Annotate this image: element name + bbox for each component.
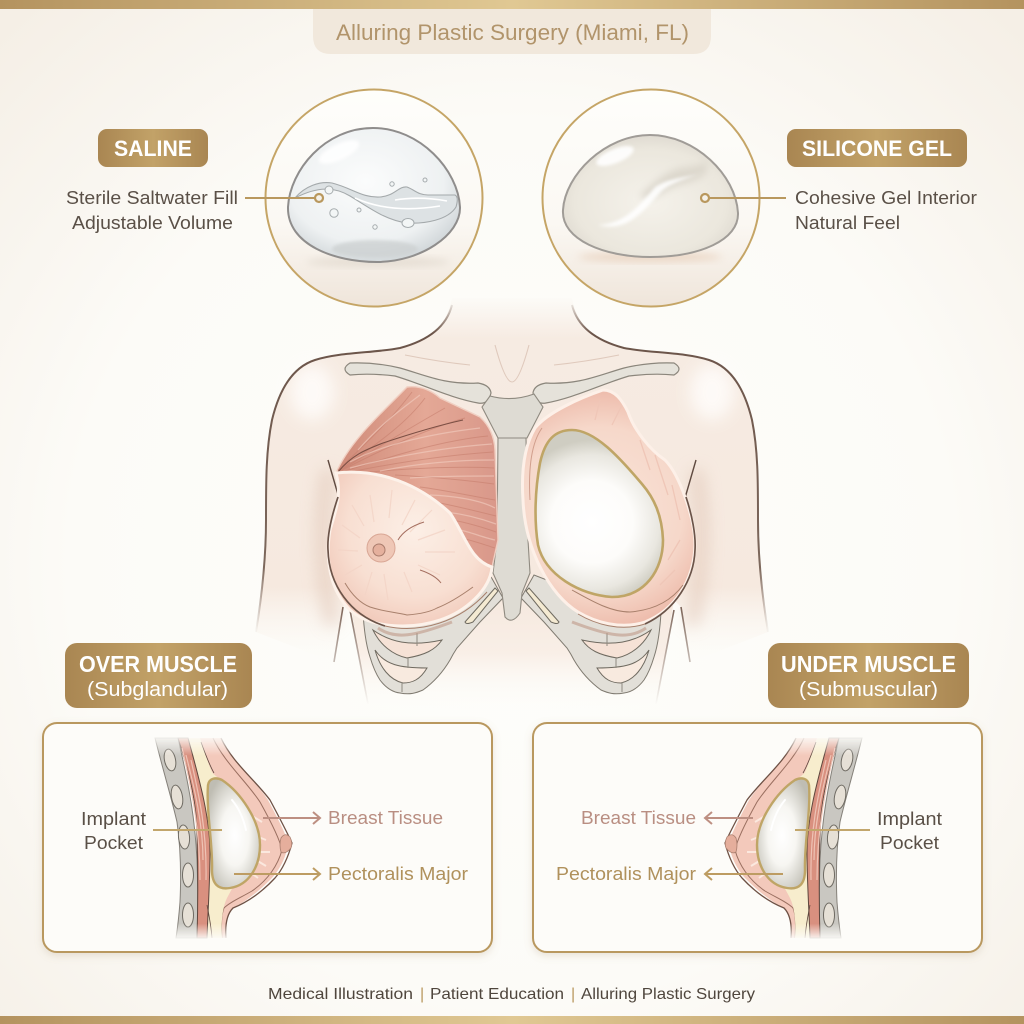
label: silicone description <box>795 188 977 233</box>
left side: pectoral muscle <box>336 387 498 567</box>
over muscle label: implant pocket: Implant <box>81 809 146 829</box>
over muscle frame <box>43 723 492 952</box>
over muscle label: implant pocket <box>81 809 146 853</box>
panel: under muscle cross-section <box>533 723 982 952</box>
bottom gold bar <box>0 1016 1024 1024</box>
label: silicone heading: SILICONE GEL <box>802 136 952 161</box>
label: saline description <box>66 188 238 233</box>
saline implant dome <box>288 128 460 267</box>
label: saline description: Sterile Saltwater Fill <box>66 188 238 208</box>
label: under muscle heading: (Submuscular) <box>799 679 938 701</box>
saline leader <box>245 194 323 202</box>
implant in pocket <box>536 430 663 597</box>
under muscle anatomy <box>725 738 862 938</box>
footer: Patient Education <box>430 986 564 1003</box>
footer: | <box>420 986 424 1003</box>
under muscle label: pectoralis major: Pectoralis Major <box>556 864 696 884</box>
footer <box>268 986 755 1003</box>
under muscle label: implant pocket: Implant <box>877 809 942 829</box>
panel: over muscle cross-section <box>43 723 492 952</box>
panel: saline implant <box>245 90 482 306</box>
silicone circle <box>542 90 760 306</box>
clavicles <box>345 363 679 403</box>
under muscle arrow: pectoralis major <box>705 868 783 880</box>
under muscle label: implant pocket <box>877 809 942 853</box>
right side: breast tissue with implant <box>522 390 695 627</box>
label: over muscle heading: OVER MUSCLE <box>79 651 237 677</box>
footer: Alluring Plastic Surgery <box>581 986 755 1003</box>
top gold bar <box>0 0 1024 9</box>
over muscle label: implant pocket: Pocket <box>84 833 143 853</box>
label: saline heading: SALINE <box>114 136 192 161</box>
over muscle label: pectoralis major: Pectoralis Major <box>328 864 468 884</box>
label: silicone description: Cohesive Gel Interior <box>795 188 977 208</box>
label: silicone heading <box>787 129 967 167</box>
label: silicone description: Natural Feel <box>795 213 900 233</box>
over muscle anatomy <box>155 738 292 938</box>
over muscle arrow: pectoralis major <box>234 868 320 880</box>
saline circle <box>266 90 482 306</box>
silicone leader <box>701 194 786 202</box>
title <box>313 9 711 54</box>
footer: | <box>571 986 575 1003</box>
over muscle label: breast tissue: Breast Tissue <box>328 808 443 828</box>
label: under muscle heading: UNDER MUSCLE <box>781 651 956 677</box>
under muscle label: implant pocket: Pocket <box>880 833 939 853</box>
under muscle leader: implant pocket <box>795 829 870 831</box>
left side: breast tissue <box>328 472 492 628</box>
torso <box>256 298 768 708</box>
under muscle label: breast tissue: Breast Tissue <box>581 808 696 828</box>
label: over muscle heading: (Subglandular) <box>87 679 228 701</box>
under muscle arrow: breast tissue <box>705 812 753 824</box>
under muscle frame <box>533 723 982 952</box>
central anatomy illustration <box>256 298 768 708</box>
label: over muscle heading <box>65 643 252 708</box>
over muscle leader: implant pocket <box>153 829 222 831</box>
title: Alluring Plastic Surgery (Miami, FL) <box>336 20 689 45</box>
label: saline heading <box>98 129 208 167</box>
panel: silicone implant <box>542 90 786 306</box>
label: saline description: Adjustable Volume <box>72 213 233 233</box>
label: under muscle heading <box>768 643 969 708</box>
over muscle arrow: breast tissue <box>263 812 320 824</box>
sternum <box>482 394 543 620</box>
rib cage <box>363 575 661 694</box>
footer: Medical Illustration <box>268 986 413 1003</box>
silicone implant dome <box>563 135 738 262</box>
